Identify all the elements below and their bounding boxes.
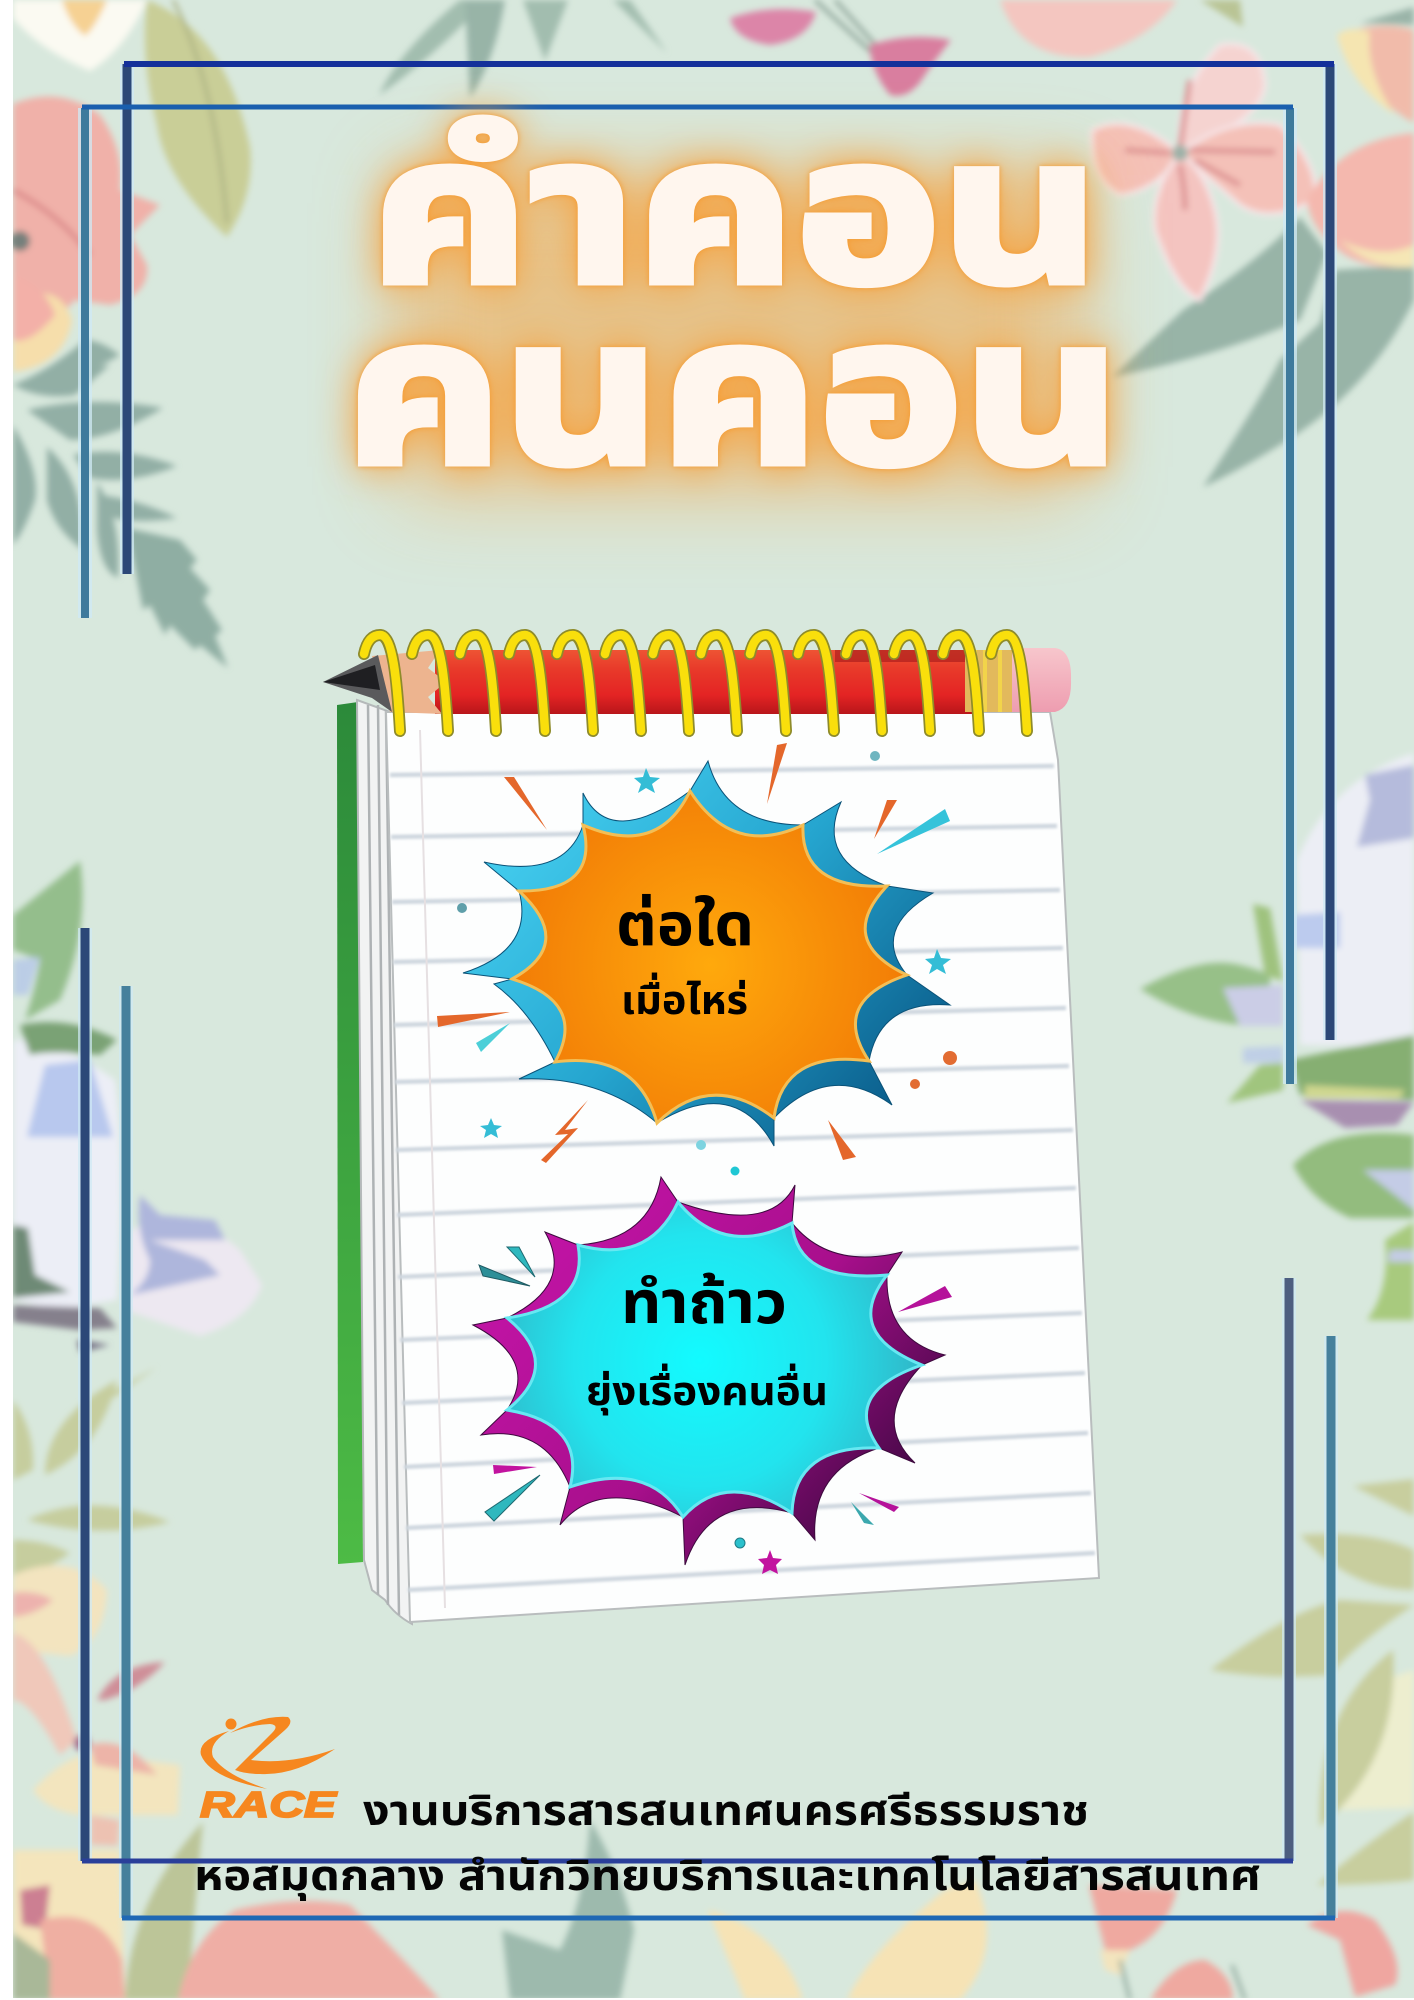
page stack bbox=[357, 700, 412, 1624]
burst subheading: ยุ่งเรื่องคนอื่น bbox=[586, 1363, 828, 1416]
ruled lines bbox=[390, 766, 1095, 1590]
orange burst sparks bbox=[437, 743, 957, 1176]
top-left flower and leaves bbox=[13, 0, 147, 71]
burst subheading: เมื่อไหร่ bbox=[621, 972, 748, 1023]
title: คำคอน bbox=[370, 97, 1100, 326]
pencil bbox=[323, 648, 1071, 714]
burst body bbox=[507, 1202, 922, 1517]
notebook bbox=[323, 635, 1099, 1624]
title bbox=[345, 97, 1121, 507]
bottom white edge bbox=[0, 1998, 1414, 2000]
lower-right leaves bbox=[1353, 1479, 1414, 1516]
burst back crescents bbox=[463, 761, 950, 1146]
notebook cover bbox=[337, 702, 363, 1564]
left-middle lavender flower bbox=[13, 861, 82, 1020]
footer text bbox=[194, 1787, 1261, 1901]
burst heading: ทำถ้าว bbox=[621, 1269, 787, 1336]
top-centre leaves and buds bbox=[379, 0, 487, 95]
burst heading: ต่อใด bbox=[616, 891, 754, 958]
burst body bbox=[512, 791, 907, 1123]
cyan burst sparks bbox=[479, 1247, 952, 1574]
top page bbox=[386, 712, 1099, 1622]
left white edge bbox=[0, 0, 13, 2000]
orange burst bbox=[463, 761, 950, 1146]
burst back crescents bbox=[473, 1177, 945, 1565]
bottom-centre plants bbox=[502, 1820, 634, 2000]
frame: bottom corner lines bbox=[82, 928, 1335, 1918]
top-right flowers and leaves bbox=[1000, 0, 1177, 57]
title: คนคอน bbox=[345, 278, 1121, 507]
RACE logo bbox=[200, 1717, 337, 1825]
cyan burst bbox=[473, 1177, 945, 1565]
footer text: หอสมุดกลาง สำนักวิทยบริการและเทคโนโลยีสารสนเทศ bbox=[194, 1852, 1261, 1901]
lower-left leaves and flowers bbox=[97, 1367, 157, 1400]
frame: top corner lines bbox=[82, 64, 1334, 1084]
title glow bbox=[400, 175, 1080, 495]
spiral rings bbox=[364, 635, 1027, 731]
RACE logo: RACE bbox=[200, 1784, 337, 1825]
right-middle flower and leaves bbox=[1297, 753, 1414, 1046]
footer text: งานบริการสารสนเทศนครศรีธรรมราช bbox=[363, 1787, 1089, 1834]
